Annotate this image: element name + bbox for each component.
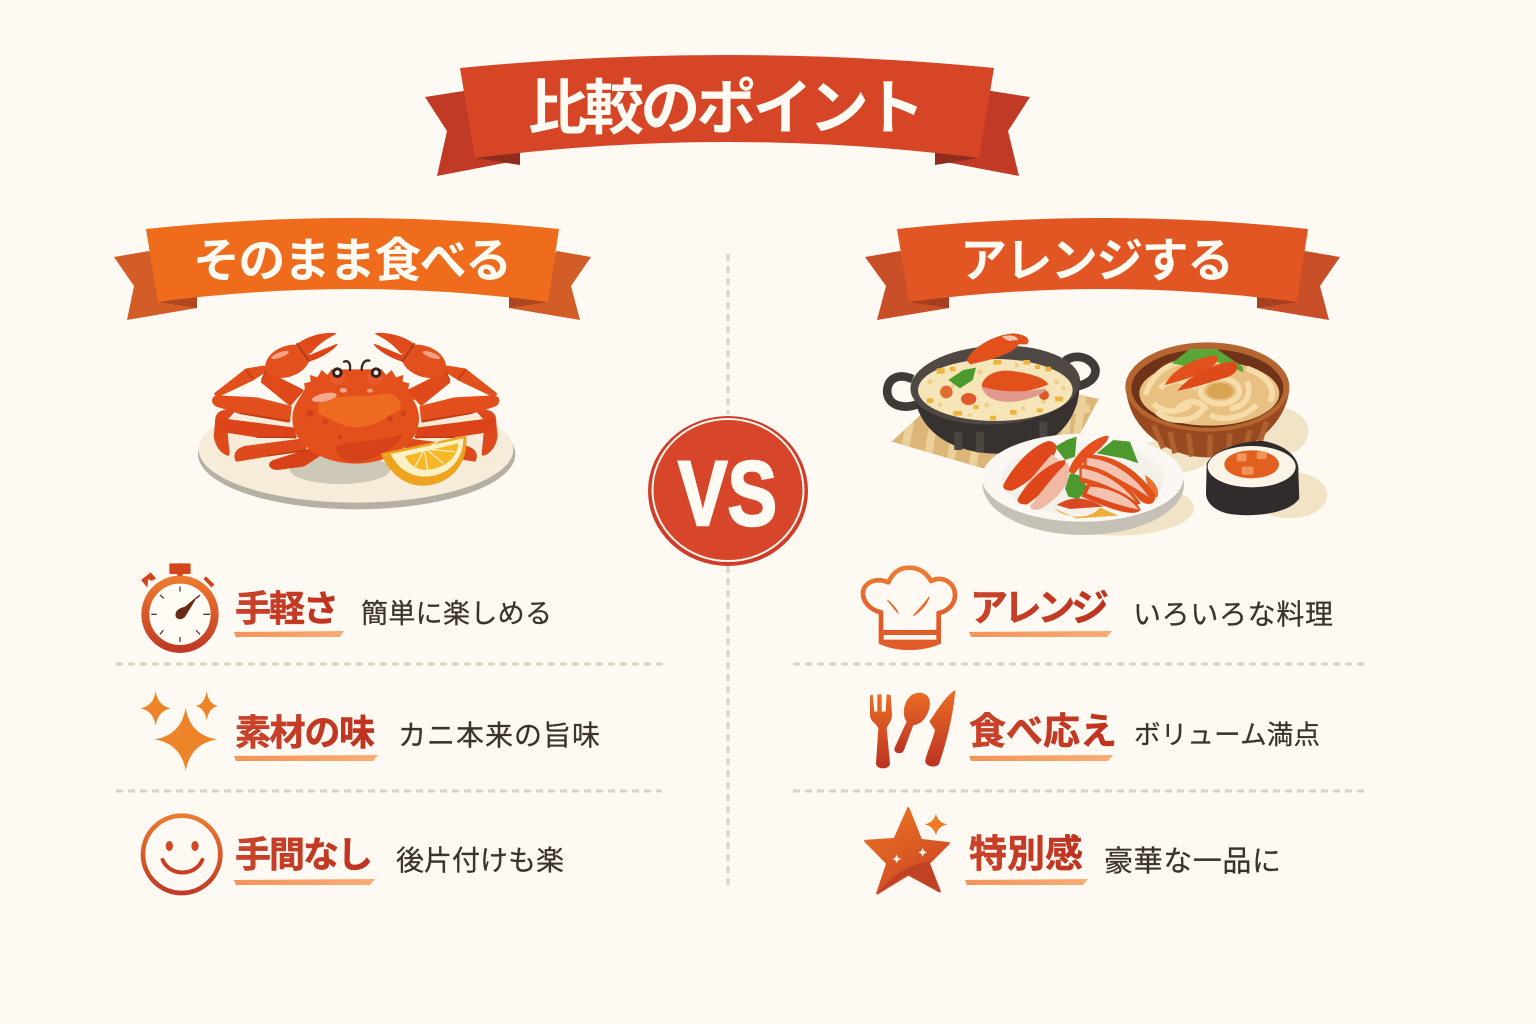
description: 簡単に楽しめる (361, 599, 552, 629)
illustration: arranged crab dishes (887, 333, 1327, 536)
VS badge: VS (678, 443, 777, 545)
crab body (298, 369, 415, 400)
row: 手軽さ (141, 563, 552, 649)
label: 素材の味: 素材の味 (235, 712, 375, 753)
description: いろいろな料理 (1133, 599, 1333, 630)
dish shadows (1242, 407, 1308, 457)
list dividers (116, 664, 1366, 791)
underline (234, 755, 378, 761)
row: 食べ応え (870, 690, 1320, 768)
trivet (892, 394, 1099, 468)
sushi roll (1206, 441, 1299, 515)
ribbon: そのまま食べる (114, 218, 591, 320)
row: 特別感 (865, 808, 1281, 894)
underline (969, 631, 1112, 637)
crab legs left (214, 334, 337, 468)
description: カニ本来の旨味 (398, 720, 600, 751)
label: アレンジ: アレンジ (970, 588, 1109, 630)
crab eyes (330, 370, 345, 385)
description: ボリューム満点 (1134, 720, 1320, 750)
underline (234, 879, 375, 885)
icon: star (865, 808, 949, 894)
label: 食べ応え: 食べ応え (969, 711, 1117, 752)
heading text: アレンジする (960, 234, 1234, 287)
label: 手間なし: 手間なし (235, 834, 373, 875)
description: 豪華な一品に (1104, 845, 1281, 878)
row: 素材の味 (141, 691, 600, 771)
title text: 比較のポイント (528, 75, 925, 142)
VS badge (648, 416, 808, 566)
illustration: crab on a plate (198, 334, 515, 509)
icon: stopwatch (141, 563, 215, 649)
icon: sparkles (141, 691, 218, 771)
underline (234, 631, 344, 637)
pan (887, 376, 917, 407)
row: 手間なし (143, 816, 564, 893)
ribbon: アレンジする (865, 218, 1340, 320)
label: 手軽さ: 手軽さ (235, 588, 339, 629)
underline (969, 755, 1113, 761)
icon: smile (143, 816, 220, 893)
description: 後片付けも楽 (396, 845, 564, 876)
row: アレンジ (863, 568, 1333, 650)
center divider (726, 254, 730, 886)
heading text: そのまま食べる (193, 234, 512, 287)
title ribbon (425, 55, 1030, 176)
wooden bowl (1126, 388, 1289, 457)
crab plate (983, 434, 1184, 535)
icon: cutlery (870, 690, 955, 768)
label: 特別感: 特別感 (969, 834, 1083, 876)
underline (965, 879, 1088, 885)
icon: chef hat (863, 568, 955, 650)
lemon (381, 435, 466, 486)
